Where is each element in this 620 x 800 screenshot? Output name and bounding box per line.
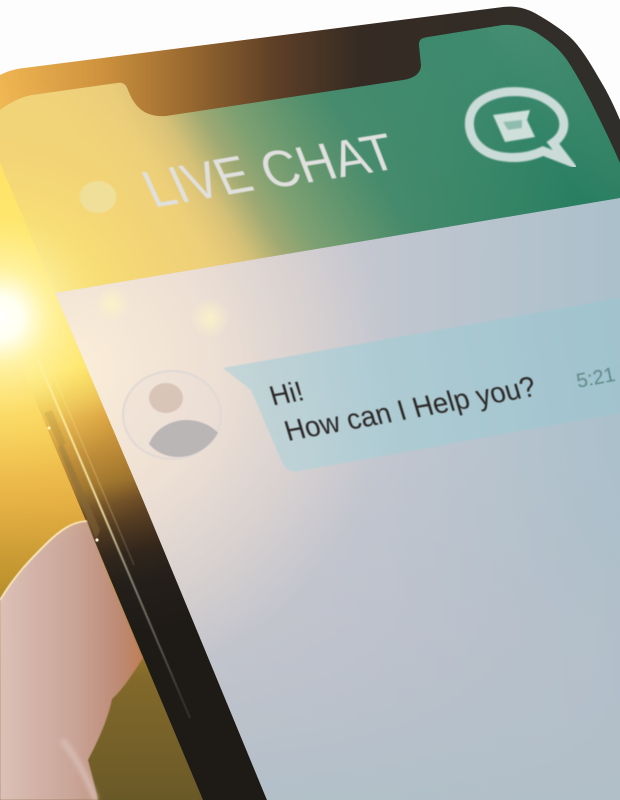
title: LIVE CHAT: LIVE: [133, 144, 261, 219]
green header: [0, 20, 620, 310]
finger crease highlight: [62, 740, 96, 800]
bezel dark notch: [44, 410, 66, 447]
message text: How can I Help you?: [281, 371, 540, 448]
avatar: [123, 371, 221, 459]
chat message bubble: [223, 298, 620, 471]
bezel glint dots: [47, 426, 99, 542]
finger rim light: [0, 521, 87, 600]
finger: [0, 521, 143, 800]
phone screen header: [0, 20, 620, 310]
icon: chat bubble: [469, 92, 566, 160]
header dot: [80, 181, 116, 213]
lens flares: [94, 286, 230, 338]
avatar head: [149, 383, 183, 413]
phone bezel top: [0, 7, 620, 300]
phone bezel left side: [0, 150, 270, 800]
golden backdrop left of phone: [0, 300, 230, 800]
title: LIVE CHAT: [133, 123, 405, 219]
bezel highlight stripes: [38, 360, 190, 718]
bezel side button: [58, 444, 100, 540]
avatar body: [149, 420, 218, 457]
title: LIVE CHAT: CHAT: [252, 123, 405, 200]
icon: document inside bubble: [493, 110, 535, 142]
message text: Hi!: [266, 376, 307, 411]
chat panel: [0, 198, 620, 800]
sunburst glare: [0, 78, 240, 558]
